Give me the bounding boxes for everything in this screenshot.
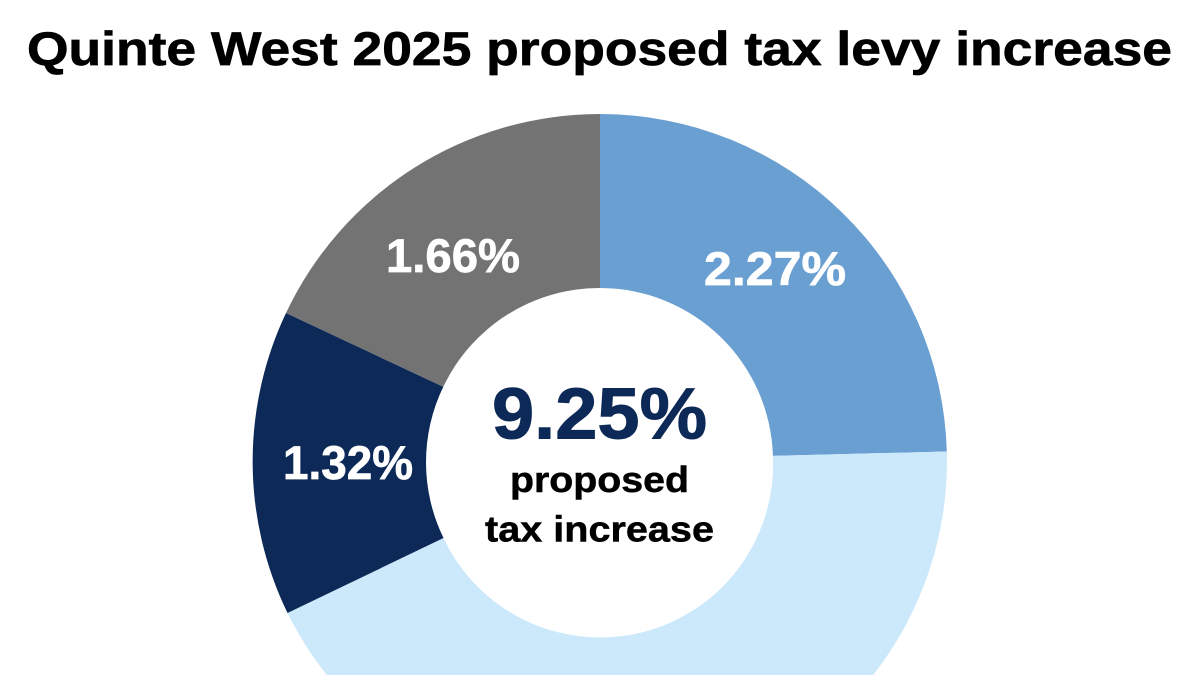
segment: 1.66% grey (286, 114, 600, 387)
segment: light blue (288, 452, 947, 675)
centre text (485, 374, 714, 550)
label: 2.27%: 2.27% (704, 242, 846, 295)
label: 1.66%: 1.66% (386, 229, 520, 282)
donut chart (253, 114, 947, 675)
segment: 2.27% mid blue (600, 114, 947, 456)
centre caption line 1: proposed (510, 459, 689, 500)
segment: 1.32% navy (253, 313, 444, 613)
centre value: 9.25%: 9.25% (492, 374, 707, 454)
title: Quinte West 2025 proposed tax levy increase (27, 22, 1172, 75)
centre caption line 2: tax increase (485, 508, 714, 550)
label: 1.32%: 1.32% (283, 436, 413, 489)
